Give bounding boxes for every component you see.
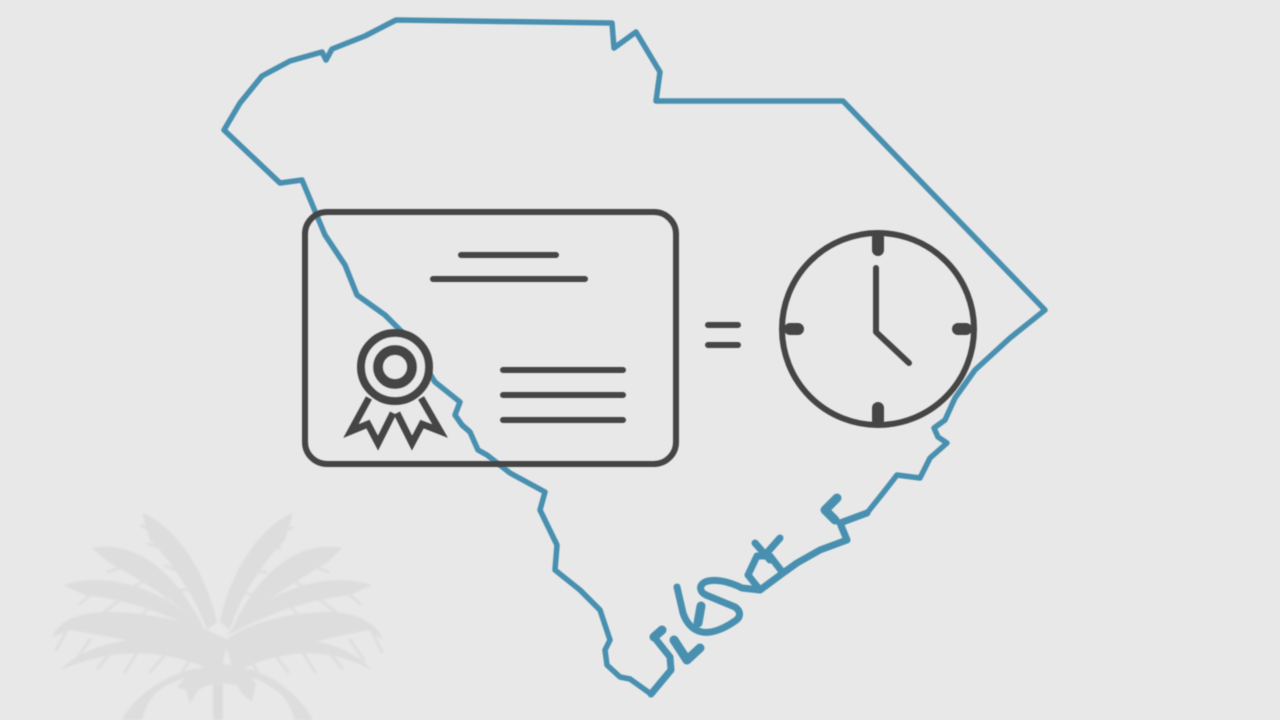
panel: certificate xyxy=(305,212,676,464)
equals sign xyxy=(708,325,738,345)
palm frond barbs xyxy=(56,526,382,678)
clock hour ticks xyxy=(790,238,966,420)
icon: faded palm tree xyxy=(52,513,383,720)
certificate title lines xyxy=(433,255,585,279)
clock hands xyxy=(876,268,909,363)
icon: clock xyxy=(782,233,974,425)
certificate body lines xyxy=(503,370,623,420)
state outline: South Carolina xyxy=(224,20,1045,694)
certificate frame xyxy=(305,212,676,464)
icon: award rosette xyxy=(351,331,440,443)
